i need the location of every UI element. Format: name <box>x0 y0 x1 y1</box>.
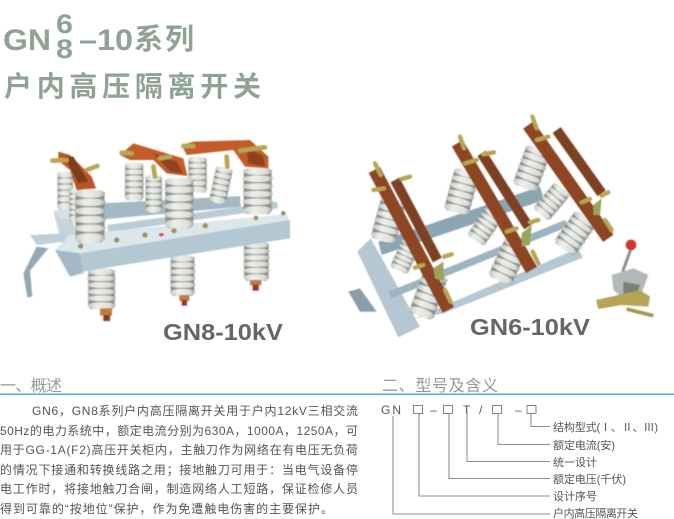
leader labels: 设计序号 <box>553 489 597 503</box>
diagram: model number legend <box>381 403 658 519</box>
title line 1: GN 6/8-10 series: GN <box>3 24 51 57</box>
text block: overview paragraph: 电工作时，将接地触刀合闸，制造网络人工短路，保证检修人员 <box>0 481 358 496</box>
photo: GN8-10kV disconnect switch <box>23 140 290 321</box>
model code row: / <box>479 403 483 417</box>
leader lines <box>393 414 550 514</box>
model code row: – <box>515 403 522 417</box>
leader labels: 额定电流(安) <box>553 438 615 452</box>
heading: overview: 一、概述 <box>0 377 62 395</box>
model code row: T <box>463 403 471 417</box>
title line 1: GN 6/8-10 series <box>3 9 194 64</box>
model code row <box>381 403 536 417</box>
title line 1: GN 6/8-10 series: 系列 <box>134 23 194 56</box>
leader labels <box>553 420 658 519</box>
leader labels: 结构型式(Ⅰ、Ⅱ、Ⅲ) <box>553 420 658 434</box>
title line 1: GN 6/8-10 series: –10 <box>79 24 133 57</box>
leader labels: 统一设计 <box>553 456 597 469</box>
text block: overview paragraph <box>0 403 358 516</box>
leader labels: 额定电压(千伏) <box>553 472 626 486</box>
caption: GN6-10kV: GN6-10kV <box>470 314 591 340</box>
model code row: – <box>430 403 437 417</box>
text block: overview paragraph: 50Hz的电力系统中，额定电流分别为630A，1000A，1250A，可 <box>0 423 358 438</box>
text block: overview paragraph: 的情况下接通和转换线路之用；接地触刀可用于：当电气设备停 <box>0 462 358 477</box>
title line 1: GN 6/8-10 series: 8 <box>56 34 73 64</box>
text block: overview paragraph: 用于GG-1A(F2)高压开关柜内，主触刀作为网络在有电压无负荷 <box>0 442 358 457</box>
title line 1: GN 6/8-10 series: 6 <box>56 9 73 39</box>
heading: model and meaning: 二、型号及含义 <box>382 377 498 395</box>
caption: GN8-10kV: GN8-10kV <box>163 319 284 345</box>
text block: overview paragraph: 得到可靠的“按地位”保护，作为免遭触电伤害的主要保护。 <box>0 501 333 516</box>
text block: overview paragraph: GN6，GN8系列户内高压隔离开关用于户内12kV三相交流 <box>32 403 358 418</box>
title line 2: indoor HV disconnector: 户内高压隔离开关 <box>4 71 261 102</box>
photo: GN6-10kV disconnect switch <box>348 117 653 337</box>
divider line <box>0 394 674 395</box>
model code row: GN <box>381 403 401 417</box>
title <box>3 9 261 102</box>
